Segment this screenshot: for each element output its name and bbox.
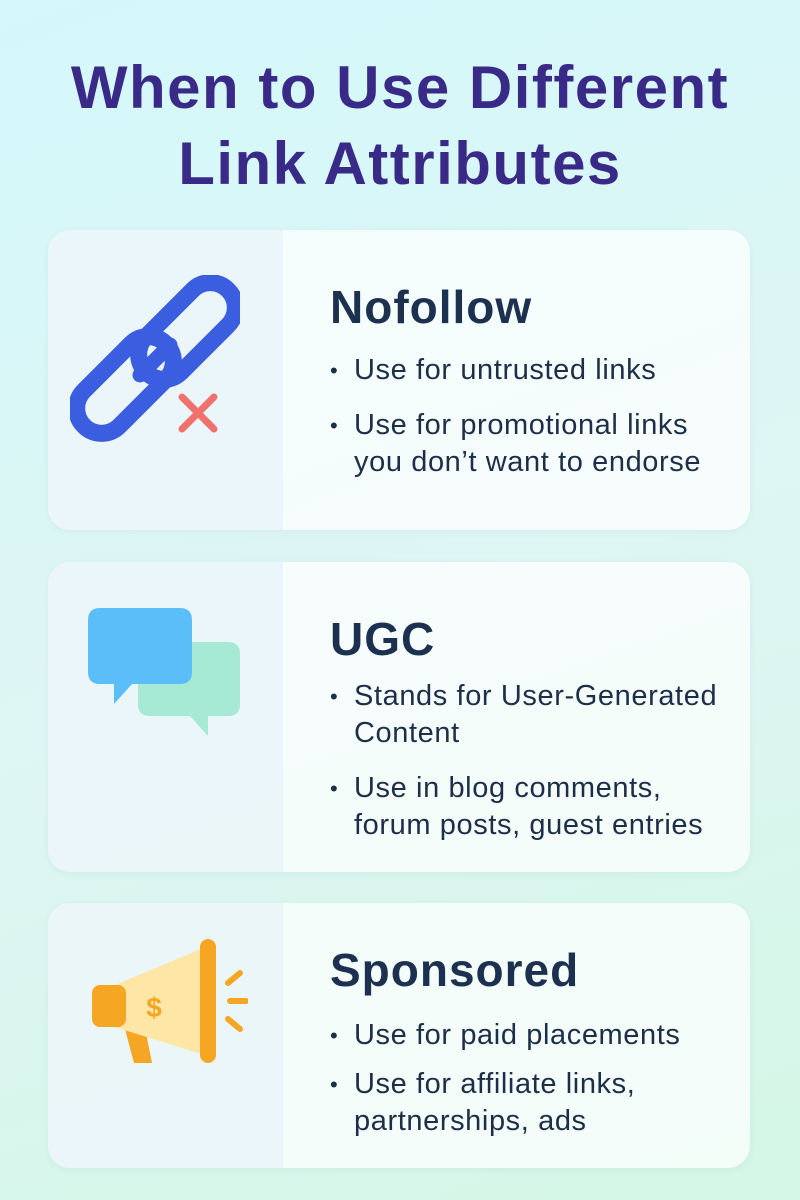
bullets xyxy=(330,680,717,841)
bullets: Use in blog comments, xyxy=(354,772,662,804)
bullets: you don’t want to endorse xyxy=(354,446,701,478)
heading: Nofollow: Nofollow xyxy=(330,281,532,333)
bullets xyxy=(330,1019,681,1137)
icon: megaphone xyxy=(92,939,248,1063)
bullets xyxy=(330,354,701,478)
bullets: Use for paid placements xyxy=(354,1019,681,1051)
icon: speech bubbles xyxy=(88,608,240,736)
bullets: Use for affiliate links, xyxy=(354,1068,635,1100)
bullets: Use for promotional links xyxy=(354,409,688,441)
heading: UGC: UGC xyxy=(330,613,435,665)
bullets: Content xyxy=(354,717,460,749)
panel: UGC xyxy=(48,562,750,872)
panel: sponsored xyxy=(48,903,750,1168)
title: Link Attributes xyxy=(178,130,622,197)
panel: nofollow xyxy=(48,230,750,530)
icon: broken chain xyxy=(70,275,240,442)
bullets: Use for untrusted links xyxy=(354,354,656,386)
heading: Sponsored: Sponsored xyxy=(330,944,579,996)
icon: megaphone: $ xyxy=(146,992,162,1023)
bullets: Stands for User-Generated xyxy=(354,680,717,712)
bullets: forum posts, guest entries xyxy=(354,809,703,841)
title: When to Use Different xyxy=(71,54,729,121)
title xyxy=(71,54,729,197)
bullets: partnerships, ads xyxy=(354,1105,587,1137)
